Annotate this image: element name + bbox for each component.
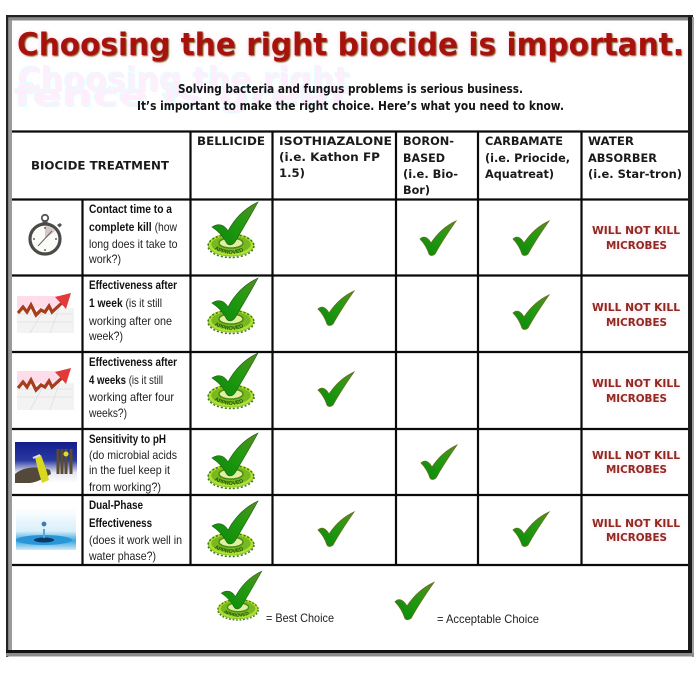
- header: water absorber: [588, 134, 682, 181]
- row 2 label: week?): [88, 329, 123, 343]
- icon: approved check row 1: APPROVED: [214, 246, 243, 254]
- verdict row 1: MICROBES: [606, 240, 667, 252]
- header: carbamate: Aquatreat): [485, 167, 554, 181]
- icon: water drop: [16, 508, 76, 550]
- legend: best choice icon: APPROVED: [224, 610, 249, 617]
- verdict row 4: MICROBES: [606, 464, 667, 476]
- row 1 label: complete kill (how: [89, 220, 177, 234]
- legend: best choice icon: [217, 570, 262, 621]
- row 2 label: Effectiveness after: [89, 278, 177, 292]
- water absorber verdicts: [592, 225, 680, 544]
- verdict row 3: WILL NOT KILL: [592, 378, 680, 390]
- icon: approved check row 5: APPROVED: [214, 546, 243, 554]
- row 4 label: (do microbial acids: [89, 448, 177, 462]
- verdict row 1: WILL NOT KILL: [592, 225, 680, 237]
- icon: rising chart, 4 weeks: [17, 368, 74, 410]
- icon: check isothiazalone row 5: [318, 512, 354, 546]
- header: water absorber: WATER: [588, 134, 634, 148]
- header: isothiazalone: (i.e. Kathon FP: [279, 150, 380, 164]
- ghost title artifact: Choosing the right: [18, 60, 350, 99]
- header: isothiazalone: [279, 134, 392, 180]
- header: carbamate: (i.e. Priocide,: [485, 151, 570, 165]
- header: carbamate: [485, 134, 570, 181]
- verdict row 4: WILL NOT KILL: [592, 450, 680, 462]
- row 3 label: weeks?): [88, 406, 127, 420]
- header: water absorber: (i.e. Star-tron): [588, 167, 682, 181]
- header: carbamate: CARBAMATE: [485, 134, 563, 148]
- acceptable checks: [318, 221, 549, 546]
- subtitle: Solving bacteria and fungus problems is serious business.: [178, 81, 523, 96]
- header: boron-based: Bor): [403, 183, 430, 197]
- row 5 label: (does it work well in: [89, 533, 182, 547]
- icon: approved check row 4: [207, 432, 259, 490]
- header: boron-based: BORON-: [403, 134, 454, 148]
- legend: acceptable label: = Acceptable Choice: [437, 612, 539, 626]
- row 1 label: Contact time to a: [89, 202, 172, 216]
- row 4 label: from working?): [89, 480, 161, 494]
- verdict row 1: [592, 225, 680, 252]
- row 4 label: in the fuel keep it: [89, 463, 171, 477]
- verdict row 5: WILL NOT KILL: [592, 518, 680, 530]
- verdict row 4: [592, 450, 680, 476]
- row 1 label: [88, 202, 178, 266]
- row 5 label: water phase?): [88, 549, 156, 563]
- icon: stopwatch: [30, 215, 62, 254]
- header: boron-based: BASED: [403, 151, 445, 165]
- row 5 label: Effectiveness: [89, 516, 152, 530]
- row 4 label: Sensitivity to pH: [89, 432, 166, 446]
- row 3 label: 4 weeks (is it still: [89, 373, 163, 387]
- subtitle: [137, 81, 564, 113]
- icon: check carbamate row 1: [513, 221, 549, 256]
- row 2 label: working after one: [88, 314, 172, 328]
- verdict row 2: [592, 302, 680, 329]
- row 3 label: [88, 355, 177, 420]
- row 5 label: [88, 498, 182, 563]
- legend: [217, 570, 539, 626]
- icon: approved check row 3: [207, 352, 258, 410]
- icon: check isothiazalone row 3: [318, 372, 354, 406]
- icon: check carbamate row 2: [513, 295, 549, 330]
- verdict row 3: [592, 378, 680, 405]
- best choice marks: Bellicide column: [207, 201, 259, 558]
- icon: check boron row 1: [420, 221, 456, 256]
- verdict row 5: MICROBES: [606, 532, 667, 544]
- verdict row 2: WILL NOT KILL: [592, 302, 680, 314]
- icon: approved check row 2: APPROVED: [214, 322, 243, 330]
- verdict row 2: MICROBES: [606, 317, 667, 329]
- icon: approved check row 2: [207, 277, 259, 334]
- verdict row 5: [592, 518, 680, 544]
- header: isothiazalone: 1.5): [279, 166, 305, 180]
- header: boron-based: (i.e. Bio-: [403, 167, 458, 181]
- subtitle: It’s important to make the right choice. Here’s what you need to know.: [137, 98, 564, 113]
- header: boron-based: [403, 134, 458, 197]
- icon: approved check row 4: APPROVED: [214, 478, 243, 486]
- icon: rising chart, 1 week: [17, 293, 74, 333]
- ghost title artifact: [14, 60, 350, 114]
- row 1 label: long does it take to: [89, 237, 178, 251]
- icon: check isothiazalone row 2: [318, 291, 354, 326]
- icon: approved check row 3: APPROVED: [214, 398, 243, 406]
- row 2 label: 1 week (is it still: [89, 296, 162, 310]
- legend: acceptable icon: [395, 582, 434, 620]
- table grid: [12, 132, 688, 565]
- verdict row 3: MICROBES: [606, 393, 667, 405]
- row 1 label: work?): [88, 252, 121, 266]
- icon: approved check row 5: [207, 500, 259, 558]
- row 2 label: [88, 278, 177, 343]
- row 4 label: [89, 432, 177, 494]
- title: Choosing the right biocide is important.: [17, 27, 684, 63]
- header: bellicide: BELLICIDE: [197, 134, 265, 148]
- row 3 label: Effectiveness after: [89, 355, 177, 369]
- row 3 label: working after four: [88, 390, 174, 404]
- header: isothiazalone: ISOTHIAZALONE: [279, 134, 392, 148]
- header row: [31, 134, 682, 197]
- header: water absorber: ABSORBER: [588, 151, 657, 165]
- icon: check boron row 4: [421, 445, 457, 480]
- header: biocide treatment: BIOCIDE TREATMENT: [31, 158, 169, 172]
- row 5 label: Dual-Phase: [89, 498, 143, 512]
- icon: pH laboratory photo: [15, 442, 77, 483]
- ghost title artifact: fence is great: [14, 79, 350, 114]
- icon: approved check row 1: [207, 201, 259, 258]
- legend: best choice label: = Best Choice: [266, 611, 334, 625]
- icon: check carbamate row 5: [513, 512, 549, 546]
